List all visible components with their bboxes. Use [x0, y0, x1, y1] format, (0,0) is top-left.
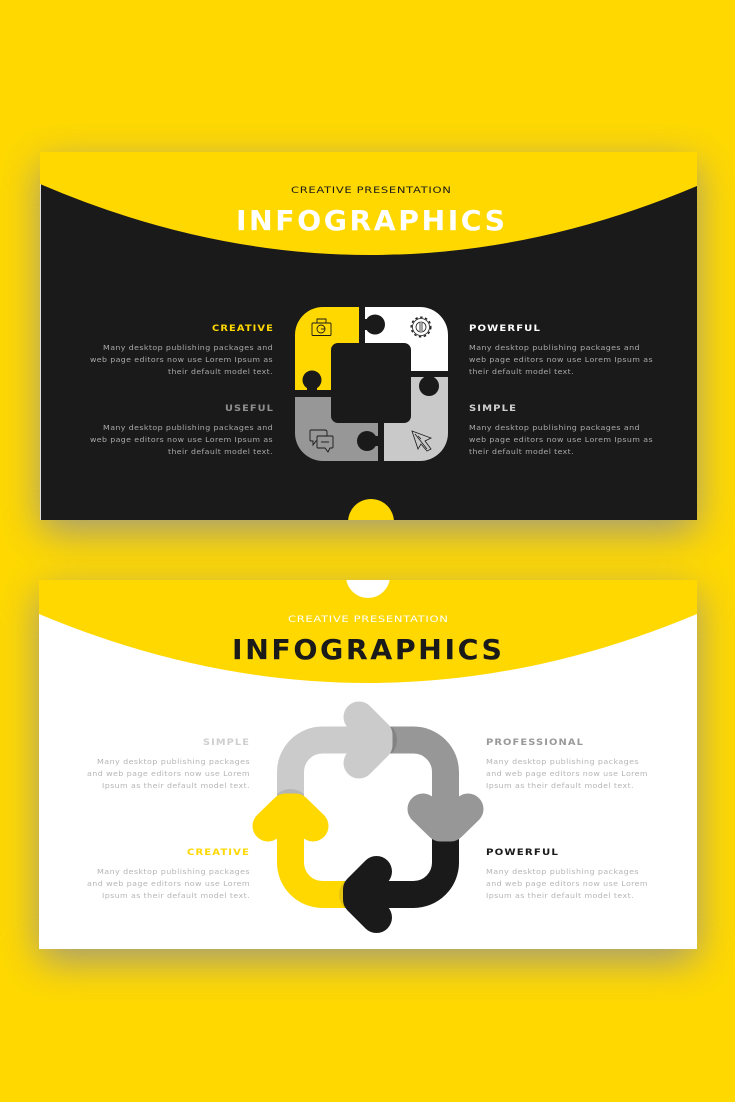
subtitle: CREATIVE PRESENTATION [288, 615, 448, 625]
text block: simple: web page editors now use Lorem Ipsum as [469, 436, 653, 444]
text block: powerful: POWERFUL [486, 848, 559, 858]
text block: simple: their default model text. [469, 448, 574, 456]
text block: creative: and web page editors now use Lorem [87, 880, 250, 888]
text block: creative: CREATIVE [212, 324, 274, 334]
text block: simple [469, 404, 653, 456]
icon: chat bubbles [310, 430, 333, 452]
arrow band: yellow [290, 810, 360, 894]
arrowhead: yellow [268, 809, 313, 826]
text block: simple: Many desktop publishing packages [97, 758, 250, 766]
white semicircle tab [346, 580, 390, 598]
text block: simple: SIMPLE [469, 404, 517, 414]
title: INFOGRAPHICS [232, 633, 504, 666]
text block: useful: USEFUL [225, 404, 274, 414]
text block: powerful: web page editors now use Lorem Ipsum as [469, 356, 653, 364]
text block: powerful: their default model text. [469, 368, 574, 376]
yellow curved header [40, 152, 697, 255]
icon: gear [411, 317, 431, 337]
text block: useful: their default model text. [168, 448, 273, 456]
text block: simple: Many desktop publishing packages and [469, 424, 640, 432]
text block: powerful: Many desktop publishing packages and [469, 344, 640, 352]
puzzle piece: white [365, 307, 448, 371]
text block: simple: Ipsum as their default model text. [102, 782, 250, 790]
subtitle: CREATIVE PRESENTATION [291, 186, 452, 196]
arrow band: black [360, 825, 446, 894]
text block: simple: SIMPLE [203, 738, 250, 748]
puzzle piece: light grey [384, 377, 448, 461]
text block: powerful: Ipsum as their default model text. [486, 892, 634, 900]
text block: simple [87, 738, 250, 790]
text block: professional: and web page editors now use Lorem [486, 770, 648, 778]
text block: creative: Many desktop publishing packages [97, 868, 250, 876]
text block: creative [90, 324, 274, 376]
arrowhead: light grey [359, 717, 377, 763]
text block: simple: and web page editors now use Lorem [87, 770, 250, 778]
text block: creative [87, 848, 250, 900]
text block: professional: Many desktop publishing packages [486, 758, 639, 766]
text block: powerful [486, 848, 648, 900]
centre dark square [331, 343, 411, 423]
puzzle piece: mid grey [295, 397, 378, 461]
yellow semicircle tab [348, 499, 394, 520]
arrow shading rings [277, 727, 397, 908]
text block: professional: PROFESSIONAL [486, 738, 584, 748]
puzzle diagram [295, 307, 448, 461]
arrow band: light grey [290, 740, 375, 800]
text block: creative: their default model text. [168, 368, 273, 376]
title: INFOGRAPHICS [236, 204, 508, 237]
text block: creative: web page editors now use Lorem Ipsum as [90, 356, 273, 364]
arrow band: mid grey [380, 740, 446, 825]
text block: creative: Many desktop publishing packages and [103, 344, 273, 352]
text block: useful: Many desktop publishing packages and [103, 424, 273, 432]
text block: creative: CREATIVE [187, 848, 250, 858]
text block: powerful: POWERFUL [469, 324, 541, 334]
text block: professional [486, 738, 648, 790]
text block: useful: web page editors now use Lorem Ipsum as [90, 436, 273, 444]
panel: light infographic slide [39, 554, 697, 949]
text block: professional: Ipsum as their default model text. [486, 782, 634, 790]
arrowhead: mid grey [423, 809, 468, 826]
text block: creative: Ipsum as their default model text. [102, 892, 250, 900]
puzzle notches [302, 314, 439, 451]
text block: powerful [469, 324, 653, 376]
text block: powerful: Many desktop publishing packages [486, 868, 639, 876]
text block: powerful: and web page editors now use Lorem [486, 880, 648, 888]
icon: cursor [412, 431, 431, 451]
cycle arrows diagram [268, 717, 468, 918]
icon: camera [312, 319, 331, 336]
puzzle piece: yellow [295, 307, 359, 390]
text block: useful [90, 404, 274, 456]
panel: dark infographic slide [40, 152, 697, 545]
arrowhead: black [358, 872, 376, 918]
yellow curved header [39, 580, 697, 683]
